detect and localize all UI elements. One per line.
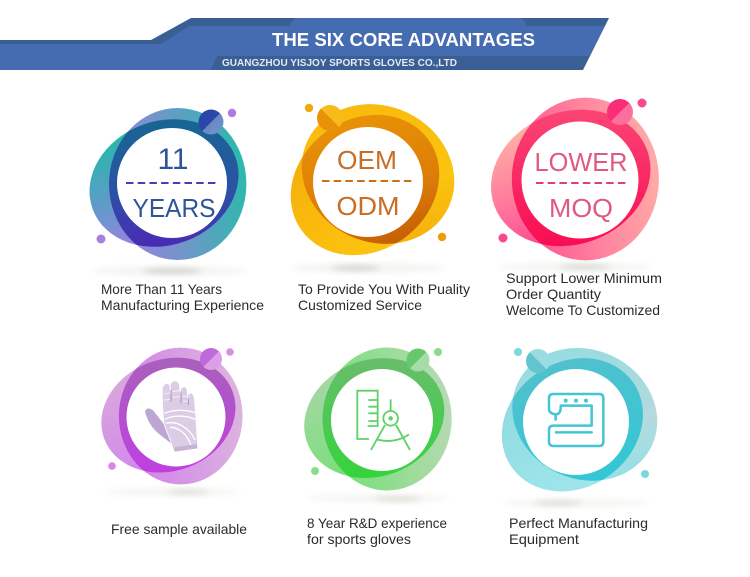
caption: Perfect Manufacturing <box>509 515 648 531</box>
shadow <box>92 266 248 276</box>
white disc <box>313 127 423 237</box>
title: THE SIX CORE ADVANTAGES <box>272 30 535 50</box>
icon: glove <box>145 381 197 452</box>
shadow <box>306 494 450 502</box>
blobs <box>304 348 452 490</box>
white disc <box>117 128 227 238</box>
label OEM ODM: OEM <box>337 145 397 175</box>
caption: Free sample available <box>111 521 247 537</box>
blobs <box>502 348 658 492</box>
advantage 5: R&D experience <box>304 348 452 547</box>
blobs <box>491 98 659 260</box>
label lower MOQ <box>534 147 628 223</box>
icon: ruler and compass <box>357 391 410 450</box>
caption: To Provide You With Puality <box>298 281 470 297</box>
label 11 years: 11 <box>158 143 188 176</box>
caption: Manufacturing Experience <box>101 297 264 313</box>
label OEM ODM <box>322 145 414 221</box>
advantage 1: 11 years <box>90 108 264 313</box>
white disc <box>523 369 629 475</box>
white disc <box>126 368 226 466</box>
dots <box>514 348 649 478</box>
icon: sewing machine <box>549 394 603 446</box>
subtitle: GUANGZHOU YISJOY SPORTS GLOVES CO.,LTD <box>222 58 457 69</box>
label OEM ODM: ODM <box>336 191 400 221</box>
dots <box>96 109 236 244</box>
advantage 6: manufacturing equipment <box>502 348 658 547</box>
label 11 years: YEARS <box>132 193 216 223</box>
caption: for sports gloves <box>307 531 411 547</box>
label 11 years <box>126 143 218 223</box>
caption: More Than 11 Years <box>101 281 222 297</box>
caption: Customized Service <box>298 297 422 313</box>
white disc <box>522 122 638 238</box>
shadow <box>104 488 240 496</box>
dots <box>108 348 234 470</box>
shadow <box>290 263 446 273</box>
dots <box>305 104 446 241</box>
label lower MOQ: MOQ <box>549 193 613 223</box>
caption: Equipment <box>509 531 579 547</box>
dots <box>498 98 646 242</box>
advantage 4: free sample <box>101 348 246 537</box>
blobs <box>101 348 242 484</box>
shadow <box>502 499 650 507</box>
caption: 8 Year R&D experience <box>307 515 447 531</box>
blobs <box>90 108 246 260</box>
advantage 2: OEM ODM <box>290 104 470 310</box>
header banner <box>0 18 609 70</box>
caption: Order Quantity <box>506 286 601 302</box>
shadow <box>497 263 653 271</box>
dots <box>311 348 442 475</box>
caption: Support Lower Minimum <box>506 270 662 286</box>
label lower MOQ: LOWER <box>534 147 628 177</box>
caption: Welcome To Customized <box>506 302 660 318</box>
advantage 3: lower MOQ <box>491 98 662 315</box>
white disc <box>331 369 433 471</box>
blobs <box>290 104 454 256</box>
